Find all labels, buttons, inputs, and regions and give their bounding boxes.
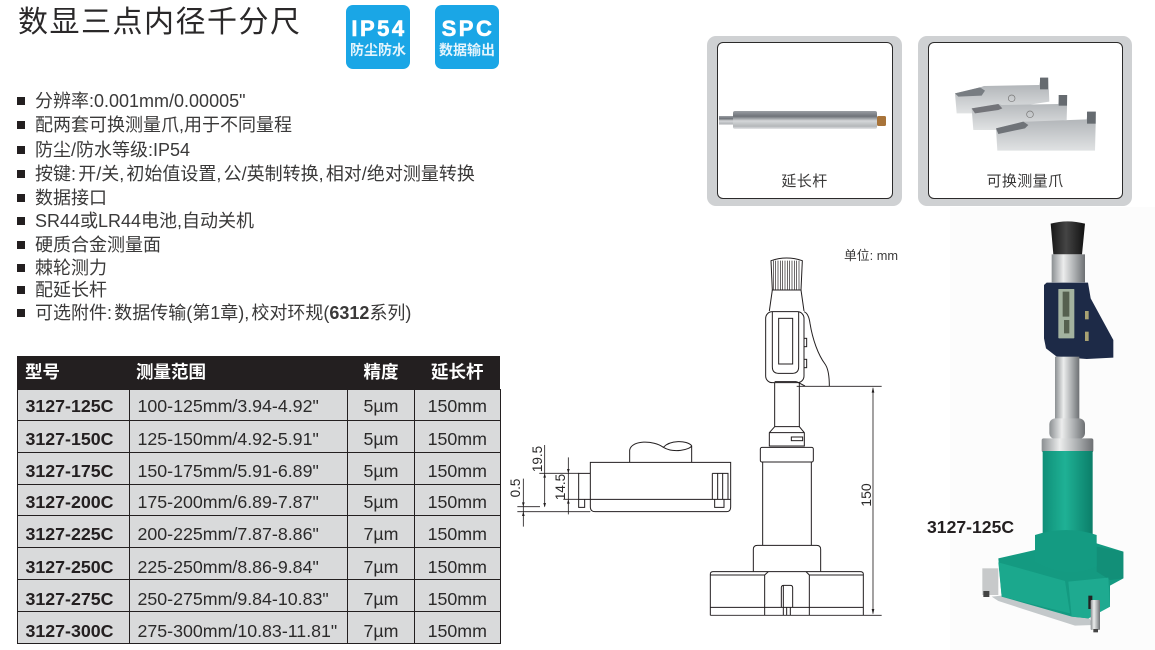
dimension label: 150: 150 <box>858 483 874 507</box>
row: 3127-250C: 7µm <box>364 556 398 576</box>
row: 3127-150C: 5µm <box>364 428 398 448</box>
feature list: 防尘/防水等级:IP54 <box>35 140 190 160</box>
table header: 型号 <box>25 362 60 382</box>
dimension label: 0.5: 0.5 <box>508 479 523 497</box>
row: 3127-200C: 5µm <box>364 492 398 512</box>
row: 3127-300C: 275-300mm/10.83-11.81" <box>138 621 337 641</box>
table header <box>17 356 500 643</box>
badge: IP54 dust and water protection: IP54 <box>351 16 407 41</box>
row: 3127-175C <box>18 453 500 484</box>
knob <box>1051 221 1085 254</box>
green body and base <box>992 451 1123 626</box>
table header: 精度 <box>364 362 398 382</box>
row: 3127-250C: 3127-250C <box>26 556 114 576</box>
row: 3127-125C <box>18 390 500 420</box>
row: 3127-250C <box>18 548 500 579</box>
row: 3127-125C: 5µm <box>364 396 398 416</box>
table header: 测量范围 <box>136 362 206 382</box>
row: 3127-225C: 7µm <box>364 524 398 544</box>
spindle shaft <box>1055 357 1079 420</box>
row: 3127-150C: 150mm <box>428 428 487 448</box>
row: 3127-175C: 150-175mm/5.91-6.89" <box>138 460 319 480</box>
drawing: micrometer front view <box>710 258 863 615</box>
dimension: 150 <box>710 386 882 615</box>
icon: extension rod photo <box>719 111 886 129</box>
product photo: digital three-point micrometer <box>982 221 1124 632</box>
row: 3127-275C: 7µm <box>364 589 398 609</box>
row: 3127-200C: 3127-200C <box>26 492 114 512</box>
feature list: SR44或LR44电池,自动关机 <box>35 211 254 231</box>
row: 3127-275C <box>18 580 500 611</box>
silver collar <box>1052 254 1085 282</box>
badge: SPC data output: 数据输出 <box>439 42 495 58</box>
row: 3127-200C: 150mm <box>428 492 487 512</box>
row: 3127-300C: 7µm <box>364 621 398 641</box>
feature list: 可选附件:数据传输(第1章),校对环规(6312系列) <box>35 303 411 323</box>
badge: IP54 dust and water protection: 防尘防水 <box>350 42 406 58</box>
row: 3127-300C: 150mm <box>428 621 487 641</box>
row: 3127-200C: 175-200mm/6.89-7.87" <box>138 492 319 512</box>
panel: extension rod <box>707 36 902 206</box>
badge: SPC data output: SPC <box>442 16 494 41</box>
digital display body <box>1044 283 1113 359</box>
row: 3127-275C: 250-275mm/9.84-10.83" <box>138 589 329 609</box>
dimension label: 14.5: 14.5 <box>553 474 568 500</box>
feature list: 配两套可换测量爪,用于不同量程 <box>35 115 292 135</box>
unit note: 单位: mm <box>844 248 898 263</box>
row: 3127-150C <box>18 421 500 452</box>
badge: IP54 dust and water protection <box>346 5 410 69</box>
icon: interchangeable jaws photo <box>955 78 1096 150</box>
right jaw tip <box>1088 596 1100 632</box>
dimensions: jaw heights <box>517 445 590 527</box>
row: 3127-150C: 125-150mm/4.92-5.91" <box>138 428 319 448</box>
caption: extension rod: 延长杆 <box>781 173 828 190</box>
row: 3127-250C: 225-250mm/8.86-9.84" <box>138 556 319 576</box>
row: 3127-300C: 3127-300C <box>26 621 114 641</box>
row: 3127-225C <box>18 516 500 547</box>
feature list: 硬质合金测量面 <box>35 235 161 255</box>
feature list: 数据接口 <box>35 188 107 208</box>
model label: 3127-125C <box>927 517 1014 537</box>
row: 3127-150C: 3127-150C <box>26 428 114 448</box>
row: 3127-275C: 150mm <box>428 589 487 609</box>
specification table <box>17 356 501 644</box>
feature list: 配延长杆 <box>35 280 107 300</box>
feature list: 按键:开/关,初始值设置,公/英制转换,相对/绝对测量转换 <box>35 164 475 184</box>
row: 3127-175C: 5µm <box>364 460 398 480</box>
table header: 延长杆 <box>431 362 484 382</box>
feature list <box>17 91 475 323</box>
left jaw tip <box>982 568 998 597</box>
title: 数显三点内径千分尺 <box>18 6 302 39</box>
feature list: 分辨率:0.001mm/0.00005" <box>35 91 246 111</box>
row: 3127-225C: 150mm <box>428 524 487 544</box>
row: 3127-300C <box>18 612 500 643</box>
badge: SPC data output <box>435 5 499 69</box>
row: 3127-275C: 3127-275C <box>26 589 114 609</box>
row: 3127-225C: 3127-225C <box>26 524 114 544</box>
dimension label: 19.5: 19.5 <box>530 446 545 472</box>
row: 3127-125C: 3127-125C <box>26 396 114 416</box>
row: 3127-125C: 100-125mm/3.94-4.92" <box>138 396 319 416</box>
caption: interchangeable jaws: 可换测量爪 <box>986 173 1064 190</box>
feature list: 棘轮测力 <box>35 258 107 278</box>
row: 3127-175C: 150mm <box>428 460 487 480</box>
drawing: jaw side view <box>579 442 731 512</box>
row: 3127-200C <box>18 485 500 515</box>
row: 3127-250C: 150mm <box>428 556 487 576</box>
row: 3127-175C: 3127-175C <box>26 460 114 480</box>
row: 3127-225C: 200-225mm/7.87-8.86" <box>138 524 319 544</box>
panel: interchangeable jaws <box>918 36 1132 206</box>
row: 3127-125C: 150mm <box>428 396 487 416</box>
